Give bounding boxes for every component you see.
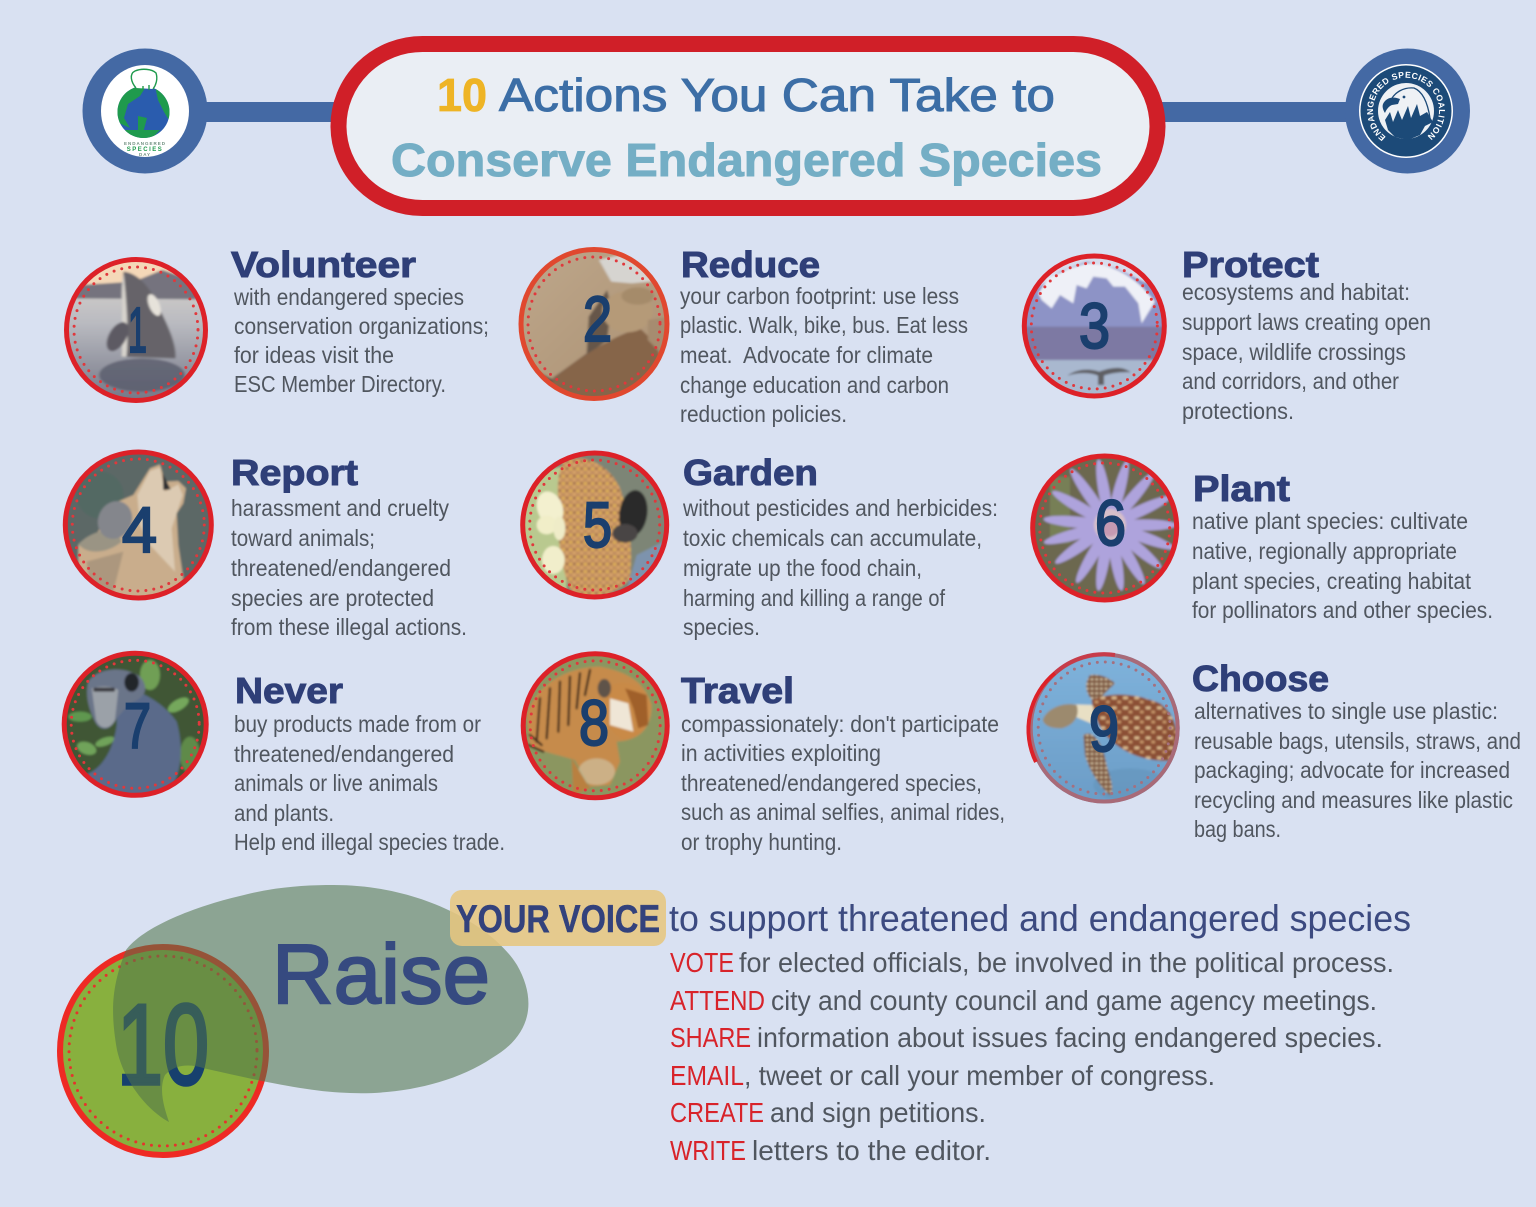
description: Plant: plant species, creating habitat (1192, 568, 1472, 594)
speech bubble (113, 885, 528, 1122)
logo: Endangered Species Day: SPECIES (127, 147, 163, 153)
photo badge: bee on flower (517, 448, 677, 602)
aster scene (1035, 458, 1174, 598)
flower scene (525, 456, 664, 594)
turtle scene (1032, 654, 1180, 804)
heading: Raise: Raise (272, 927, 490, 1021)
action list: VOTE (670, 947, 734, 978)
photo badge: tiger (520, 651, 670, 800)
connector bar right (1155, 102, 1355, 122)
heading: Plant: Plant (1193, 468, 1290, 509)
title line 2: Conserve Endangered Species (391, 134, 1102, 186)
description: Never: animals or live animals (234, 770, 438, 796)
action list: CREATE (670, 1097, 764, 1128)
description: Report: harassment and cruelty (231, 495, 449, 521)
description: Plant: for pollinators and other species. (1192, 597, 1493, 623)
heading: Volunteer: Volunteer (231, 244, 416, 285)
panel: 1 Volunteer (64, 250, 488, 403)
description: Never: Help end illegal species trade. (234, 829, 505, 855)
title line 1: Actions You Can Take to (499, 69, 1055, 121)
action list: for elected officials, be involved in the political process. (739, 947, 1394, 978)
title pill (338, 44, 1158, 208)
panel: 3 Protect (1020, 244, 1431, 424)
description: Plant: native, regionally appropriate (1192, 538, 1457, 564)
number 5: 5 (583, 489, 612, 561)
header banner (82, 36, 1470, 216)
action list: information about issues facing endangered species. (757, 1022, 1383, 1053)
description: Protect (1182, 279, 1431, 424)
description: Reduce: meat. Advocate for climate (680, 342, 933, 368)
logo: Endangered Species Day: ENDANGERED (124, 141, 166, 146)
description: Protect: protections. (1182, 398, 1294, 424)
pika scene (524, 252, 664, 396)
description: Report (231, 495, 467, 640)
description: Protect: space, wildlife crossings (1182, 339, 1406, 365)
orca scene (69, 262, 203, 398)
description: Choose: packaging; advocate for increased (1194, 757, 1510, 783)
number 9: 9 (1089, 693, 1119, 765)
description: Protect: support laws creating open (1182, 309, 1431, 335)
chimpanzee scene (66, 656, 204, 793)
description: Never: threatened/endangered (234, 741, 454, 767)
heading: Never: Never (235, 670, 343, 711)
description: Garden: harming and killing a range of (683, 585, 946, 611)
description: Garden: toxic chemicals can accumulate, (683, 525, 982, 551)
green number badge (58, 945, 268, 1157)
description: Travel: in activities exploiting (681, 740, 881, 766)
description: Garden: migrate up the food chain, (683, 555, 922, 581)
description: Volunteer (233, 284, 489, 397)
description: Never: and plants. (234, 800, 334, 826)
description: Protect: ecosystems and habitat: (1182, 279, 1410, 305)
number 10: 10 (117, 982, 209, 1109)
logo: Endangered Species Day (82, 48, 208, 174)
action list: city and county council and game agency meetings. (771, 985, 1377, 1016)
number 1: 1 (128, 294, 147, 366)
description: Volunteer: with endangered species (233, 284, 464, 310)
description: Garden: without pesticides and herbicides: (682, 495, 998, 521)
panel: 5 Garden (517, 448, 998, 640)
description: Choose: bag bans. (1194, 816, 1281, 842)
description: Reduce: reduction policies. (680, 401, 847, 427)
number 8: 8 (579, 687, 609, 759)
photo badge: orca (64, 257, 208, 403)
description: Travel: compassionately: don't participate (681, 711, 999, 737)
heading: Report: Report (231, 452, 358, 493)
photo badge: aster flower (1027, 450, 1183, 607)
tiger scene (526, 656, 665, 796)
description: Never (234, 711, 505, 855)
action list: EMAIL (670, 1060, 744, 1091)
heading: Reduce: Reduce (681, 244, 820, 285)
description: Report: threatened/endangered (231, 555, 451, 581)
number 6: 6 (1095, 487, 1126, 559)
description: Reduce: plastic. Walk, bike, bus. Eat less (680, 312, 968, 338)
photo badge: chimpanzee (62, 650, 209, 798)
action list: , tweet or call your member of congress. (744, 1060, 1215, 1091)
connector bar left (200, 102, 340, 122)
heading: Travel: Travel (681, 670, 794, 711)
highlight box (450, 890, 666, 946)
description: Plant (1192, 508, 1493, 623)
photo badge: sea turtle (1027, 648, 1183, 808)
logo: Endangered Species Coalition eagle (1346, 48, 1470, 174)
description: Never: buy products made from or (234, 711, 481, 737)
number 2: 2 (583, 283, 612, 355)
description: Volunteer: ESC Member Directory. (234, 371, 446, 397)
description: Report: species are protected (231, 585, 434, 611)
panel: 4 Report (60, 448, 467, 640)
panel: 10 Raise your voice (58, 885, 1411, 1166)
heading: your voice: YOUR VOICE (456, 898, 660, 941)
action list: WRITE (670, 1135, 746, 1166)
mountain scene (1026, 260, 1162, 394)
action list: ATTEND (670, 985, 765, 1016)
description: Reduce: your carbon footprint: use less (680, 283, 959, 309)
description: Plant: native plant species: cultivate (1192, 508, 1468, 534)
logo: Endangered Species Day: DAY (139, 152, 151, 157)
description: Travel: or trophy hunting. (681, 829, 842, 855)
description: Choose: alternatives to single use plastic: (1194, 698, 1498, 724)
panel: 6 Plant (1027, 450, 1493, 623)
panel: 2 Reduce (509, 240, 968, 427)
description: Travel: threatened/endangered species, (681, 770, 982, 796)
description: Reduce (680, 283, 968, 427)
heading: Protect: Protect (1182, 244, 1319, 285)
subheading: to support threatened and endangered species (669, 898, 1411, 939)
wolf scene (68, 454, 209, 596)
description: Report: toward animals; (231, 525, 375, 551)
panel: 7 Never (57, 648, 505, 855)
logo: Endangered Species Coalition eagle: ENDANGERED SPECIES COALITION (1367, 72, 1445, 142)
description: Protect: and corridors, and other (1182, 368, 1399, 394)
heading: Choose: Choose (1192, 658, 1329, 699)
description: Report: from these illegal actions. (231, 614, 467, 640)
description: Volunteer: for ideas visit the (234, 342, 394, 368)
description: Reduce: change education and carbon (680, 372, 949, 398)
panel: 9 Choose (1027, 648, 1521, 842)
description: Garden (682, 495, 998, 640)
photo badge: wolf (60, 448, 217, 602)
action list: and sign petitions. (770, 1097, 986, 1128)
description: Choose (1194, 698, 1521, 842)
title line 1: 10 (437, 69, 487, 121)
description: Travel: such as animal selfies, animal rides, (681, 799, 1005, 825)
number 3: 3 (1079, 290, 1110, 362)
number 7: 7 (124, 690, 151, 762)
action list: SHARE (670, 1022, 751, 1053)
action list (670, 947, 1394, 1166)
photo badge: mountain and whale tail (1020, 252, 1170, 400)
panel: 8 Travel (517, 648, 1005, 855)
photo badge: pika (518, 247, 670, 401)
action list: letters to the editor. (752, 1135, 991, 1166)
description: Volunteer: conservation organizations; (234, 313, 489, 339)
heading: Garden: Garden (683, 452, 818, 493)
description: Garden: species. (683, 614, 760, 640)
number 4: 4 (122, 494, 157, 566)
description: Travel (681, 711, 1005, 855)
